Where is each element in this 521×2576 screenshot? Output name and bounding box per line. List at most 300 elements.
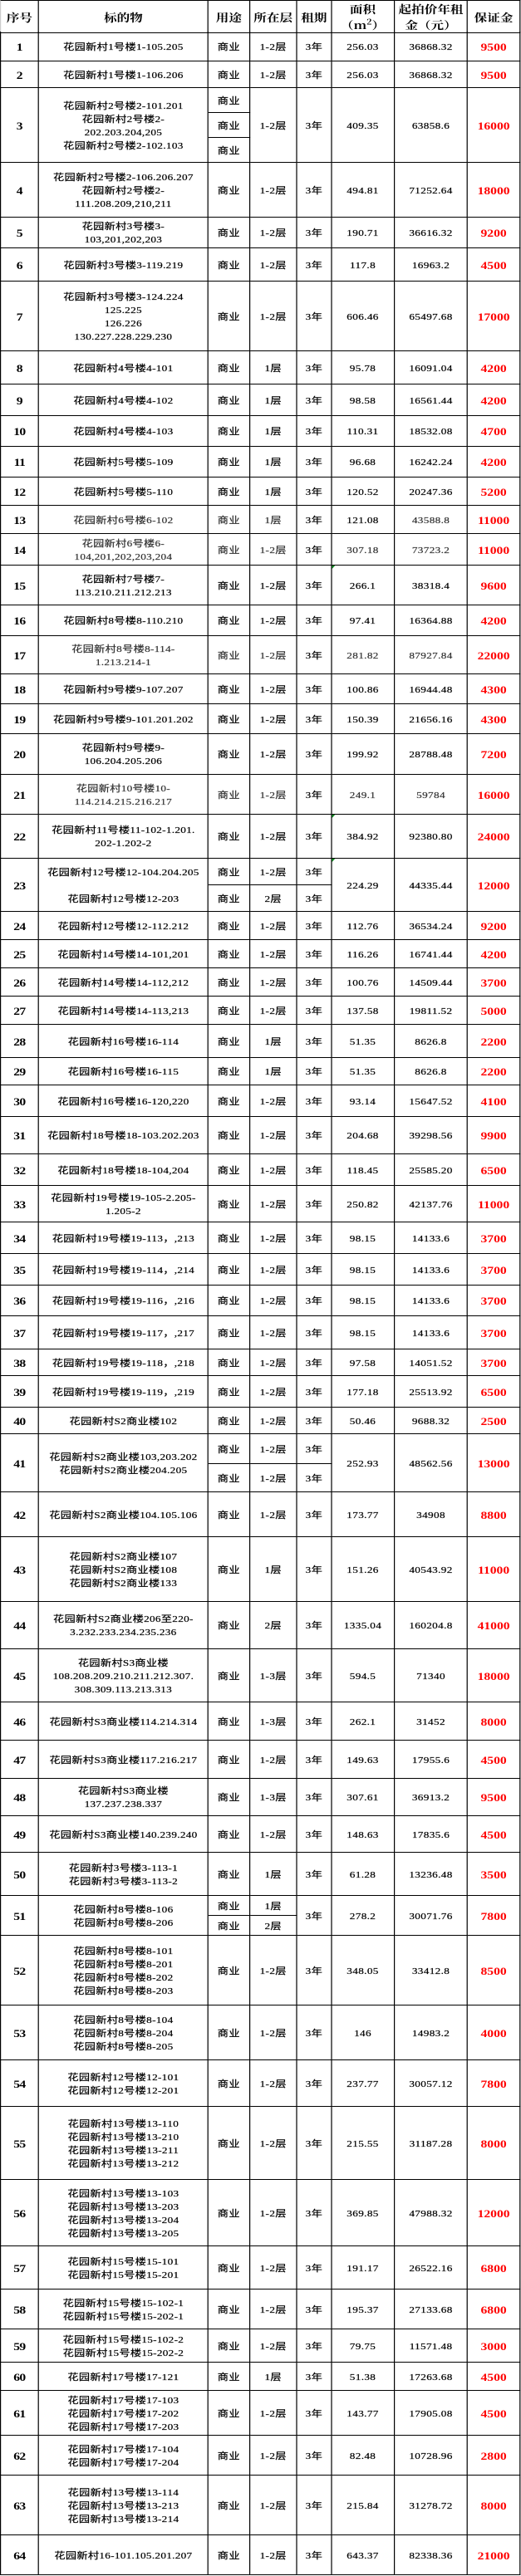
row 16: 4200 (480, 615, 507, 627)
row 46: 商业 (218, 1717, 240, 1727)
row 9: 商业 (218, 395, 240, 405)
row 7: 126.226 (105, 319, 142, 329)
row 64: 商业 (218, 2551, 240, 2561)
row 56: 商业 (218, 2209, 240, 2219)
row 56: 花园新村13号楼13-204 (67, 2216, 179, 2226)
row 35: 花园新村19号楼19-114，,214 (52, 1266, 194, 1276)
row 52: 3年 (306, 1966, 322, 1976)
row 59: 3000 (480, 2340, 507, 2352)
row 34: 14133.6 (412, 1234, 450, 1244)
row 47: 1-2层 (260, 1756, 287, 1765)
row 51: 花园新村8号楼8-106 (73, 1905, 173, 1915)
row 57: 26522.16 (409, 2264, 453, 2274)
row 2: 商业 (218, 70, 240, 80)
row 58: 3年 (306, 2305, 322, 2315)
row 33: 1-2层 (260, 1199, 287, 1209)
row 4: 71252.64 (409, 186, 453, 196)
row 45: 308.309.113.213.313 (75, 1684, 172, 1694)
row 47 (0, 1741, 521, 1779)
row 17: 1-2层 (260, 651, 287, 661)
row 52: 花园新村8号楼8-101 (73, 1947, 173, 1956)
row 12: 20247.36 (409, 487, 453, 497)
row 21: 3年 (306, 791, 322, 801)
header: starting annual rent: 金（元） (405, 17, 457, 32)
header: lease term (297, 0, 332, 33)
row 44 (0, 1602, 521, 1649)
row 37: 商业 (218, 1329, 240, 1339)
row 34: 98.15 (350, 1234, 376, 1244)
row 16: 16364.88 (409, 616, 453, 626)
row 3: 商业 (218, 96, 240, 106)
row 43: 花园新村S2商业楼133 (69, 1578, 177, 1588)
row 10: 花园新村4号楼4-103 (73, 427, 173, 437)
row 18: 4300 (480, 683, 507, 696)
row 31: 9900 (480, 1129, 507, 1142)
row 52: 花园新村8号楼8-201 (73, 1960, 173, 1970)
row 3: 商业 (218, 146, 240, 156)
row 42: 商业 (218, 1510, 240, 1520)
row 55: 花园新村13号楼13-210 (67, 2133, 179, 2143)
row 55: 花园新村13号楼13-110 (68, 2119, 179, 2129)
row 55: 8000 (480, 2138, 507, 2149)
row 61: 花园新村17号楼17-202 (67, 2408, 179, 2418)
row 42: 花园新村S2商业楼104.105.106 (49, 1510, 198, 1520)
row 34: 34 (13, 1232, 26, 1244)
row 45: 45 (13, 1669, 26, 1682)
row 48: 9500 (480, 1791, 507, 1804)
row 64 (0, 2535, 521, 2575)
row 36: 花园新村19号楼19-116，,216 (52, 1296, 194, 1306)
row 45: 商业 (218, 1671, 240, 1681)
row 32: 25585.20 (409, 1166, 453, 1176)
row 5: 商业 (218, 228, 240, 238)
row 54: 3年 (306, 2079, 322, 2089)
row 1 (0, 32, 520, 61)
row 60: 花园新村17号楼17-121 (67, 2372, 179, 2382)
row 47: 商业 (218, 1756, 240, 1765)
row 4: 1-2层 (260, 186, 287, 196)
row 10: 商业 (218, 427, 240, 437)
row 31: 204.68 (347, 1131, 379, 1141)
row 18 (0, 674, 520, 704)
row 44: 3年 (306, 1621, 322, 1631)
row 53: 146 (354, 2028, 371, 2038)
row 44: 3.232.233.234.235.236 (70, 1628, 177, 1638)
row 30: 4100 (480, 1095, 507, 1108)
row 61 (0, 2391, 521, 2436)
header: lease term: 租期 (301, 8, 327, 25)
row 26: 3700 (480, 977, 507, 988)
row 56: 花园新村13号楼13-103 (67, 2189, 179, 2199)
row 15: 花园新村7号楼7- (82, 575, 165, 585)
row 15: 15 (13, 580, 26, 591)
row 4: 494.81 (347, 186, 379, 196)
row 30: 30 (13, 1095, 26, 1108)
row 3: 3年 (306, 121, 322, 131)
row 3: 202.203.204,205 (85, 128, 162, 138)
row 31: 39298.56 (409, 1131, 453, 1141)
row 19: 商业 (218, 714, 240, 724)
row 43: 43 (13, 1563, 26, 1576)
row 64: 82338.36 (409, 2551, 453, 2561)
row 2 (0, 61, 520, 88)
row 37: 37 (13, 1327, 26, 1339)
row 42 (0, 1492, 521, 1537)
row 56: 12000 (478, 2207, 510, 2219)
row 27: 花园新村14号楼14-113,213 (57, 1006, 189, 1016)
row 35: 商业 (218, 1266, 240, 1276)
row 63: 3年 (306, 2501, 322, 2511)
row 34: 商业 (218, 1234, 240, 1244)
row 29: 花园新村16号楼16-115 (68, 1067, 179, 1077)
row 55 (0, 2107, 521, 2180)
row 8: 商业 (218, 364, 240, 374)
row 25: 花园新村14号楼14-101,201 (57, 950, 189, 960)
row 19: 19 (13, 713, 26, 726)
row 57: 3年 (306, 2264, 322, 2274)
row 60 (0, 2363, 521, 2391)
row 41: 3年 (306, 1473, 322, 1483)
row 16: 商业 (218, 616, 240, 626)
row 54: 54 (13, 2078, 26, 2089)
row 53: 14983.2 (412, 2028, 450, 2038)
row 59: 59 (13, 2340, 26, 2352)
row 45 (0, 1649, 521, 1702)
row 9: 98.58 (350, 395, 376, 405)
row 25: 4200 (480, 948, 507, 960)
row 16: 1-2层 (260, 616, 287, 626)
row 9: 花园新村4号楼4-102 (73, 395, 173, 405)
row 35: 14133.6 (412, 1266, 450, 1276)
row 25: 16741.44 (409, 950, 453, 960)
header: area: （m2） (341, 17, 385, 32)
row 53: 3年 (306, 2028, 322, 2038)
row 31: 3年 (306, 1131, 322, 1141)
row 55: 31187.28 (410, 2139, 452, 2149)
row 19: 3年 (306, 714, 322, 724)
row 46: 1-3层 (260, 1717, 287, 1727)
row 13: 3年 (306, 515, 322, 525)
row 16: 3年 (306, 616, 322, 626)
row 63: 花园新村13号楼13-214 (67, 2515, 179, 2525)
row 40: 2500 (480, 1415, 507, 1427)
row 12: 5200 (480, 485, 507, 498)
row 32: 3年 (306, 1166, 322, 1176)
row 46: 262.1 (350, 1717, 376, 1727)
row 32: 118.45 (347, 1166, 379, 1176)
row 55: 3年 (306, 2139, 322, 2149)
row 2: 3年 (306, 70, 322, 80)
row 36: 商业 (218, 1296, 240, 1306)
header: area: 面积 (350, 1, 376, 17)
row 47: 3年 (306, 1756, 322, 1765)
row 15: 1-2层 (260, 581, 287, 591)
row 14: 73723.2 (412, 545, 450, 555)
row 1: 9500 (480, 40, 507, 53)
row 51: 2层 (264, 1922, 282, 1932)
row 64: 643.37 (347, 2551, 379, 2561)
row 44: 41000 (478, 1619, 510, 1632)
row 2: 36868.32 (409, 70, 453, 80)
row 7: 130.227.228.229.230 (74, 332, 172, 342)
row 58: 花园新村15号楼15-202-1 (63, 2312, 184, 2322)
row 45: 108.208.209.210.211.212.307. (53, 1671, 194, 1681)
row 18: 16944.48 (409, 684, 453, 694)
row 27: 27 (13, 1005, 26, 1016)
row 23: 花园新村12号楼12-203 (67, 894, 179, 904)
row 5: 花园新村3号楼3- (82, 222, 165, 232)
row 59: 79.75 (350, 2342, 376, 2352)
row 16: 16 (13, 615, 26, 627)
row 22: 22 (13, 830, 26, 843)
row 50: 花园新村3号楼3-113-1 (69, 1863, 178, 1873)
row 56: 花园新村13号楼13-205 (67, 2229, 179, 2239)
row 19: 1-2层 (260, 714, 287, 724)
row 62: 2800 (480, 2450, 507, 2461)
row 51 (0, 1896, 521, 1936)
row 13 (0, 506, 520, 534)
row 23: 44335.44 (409, 880, 453, 890)
row 3: 商业 (218, 121, 240, 131)
row 6: 117.8 (350, 261, 376, 271)
header: subject (39, 0, 209, 33)
row 23: 3年 (306, 867, 322, 877)
row 51: 1层 (264, 1902, 282, 1912)
row 38: 3年 (306, 1359, 322, 1369)
row 49: 49 (13, 1829, 26, 1840)
row 58: 58 (13, 2304, 26, 2315)
row 11: 4200 (480, 456, 507, 468)
row 10: 3年 (306, 427, 322, 437)
row 48: 307.61 (347, 1793, 379, 1803)
row 51: 51 (13, 1910, 26, 1922)
row 44: 商业 (218, 1621, 240, 1631)
row 29: 29 (13, 1065, 26, 1078)
row 45: 71340 (416, 1671, 445, 1681)
row 24: 商业 (218, 922, 240, 932)
row 40: 9688.32 (412, 1417, 450, 1427)
row 45: 18000 (478, 1669, 510, 1682)
row 50: 商业 (218, 1870, 240, 1880)
row 47: 149.63 (347, 1756, 379, 1765)
row 20: 7200 (480, 748, 507, 761)
row 23 (0, 859, 520, 912)
row 59 (0, 2329, 521, 2363)
row 16: 97.41 (350, 616, 376, 626)
row 15: 266.1 (350, 581, 376, 591)
row 25: 25 (13, 948, 26, 960)
row 55: 花园新村13号楼13-212 (67, 2159, 179, 2169)
row 7: 606.46 (347, 312, 379, 322)
row 4: 3年 (306, 186, 322, 196)
row 35: 1-2层 (260, 1266, 287, 1276)
row 47: 花园新村S3商业楼117.216.217 (49, 1756, 197, 1765)
row 11: 3年 (306, 458, 322, 468)
row 32: 花园新村18号楼18-104,204 (57, 1166, 189, 1176)
row 47: 47 (13, 1754, 26, 1765)
row 33: 花园新村19号楼19-105-2.205- (51, 1193, 196, 1202)
row 3: 16000 (478, 120, 510, 131)
row 21: 16000 (478, 789, 510, 801)
row 17 (0, 636, 520, 674)
row 31: 商业 (218, 1131, 240, 1141)
row 39: 花园新村19号楼19-119，,219 (52, 1387, 194, 1397)
row 13: 花园新村6号楼6-102 (73, 515, 173, 525)
row 13: 43588.8 (412, 515, 450, 525)
row 7: 花园新村3号楼3-124.224 (63, 292, 184, 302)
row 58: 27133.68 (409, 2305, 453, 2315)
row 3: 409.35 (347, 121, 379, 131)
row 48: 商业 (218, 1793, 240, 1803)
row 38: 1-2层 (260, 1359, 287, 1369)
row 61: 花园新村17号楼17-103 (67, 2395, 179, 2405)
row 48: 花园新村S3商业楼 (78, 1786, 169, 1796)
row 13: 13 (13, 513, 26, 526)
row 43 (0, 1537, 521, 1602)
row 39: 39 (13, 1385, 26, 1398)
row 56: 花园新村13号楼13-203 (67, 2202, 179, 2212)
row 60: 60 (13, 2370, 26, 2383)
row 1: 花园新村1号楼1-105.205 (63, 42, 184, 51)
row 3: 花园新村2号楼2-101.201 (63, 101, 184, 111)
row 46: 花园新村S3商业楼114.214.314 (49, 1717, 197, 1727)
row 21: 1-2层 (260, 791, 287, 801)
row 56: 3年 (306, 2209, 322, 2219)
row 50: 61.28 (350, 1870, 376, 1880)
row 7: 商业 (218, 312, 240, 322)
row 15: 113.210.211.212.213 (75, 588, 172, 598)
row 26: 14509.44 (409, 978, 453, 988)
row 63: 215.84 (347, 2501, 379, 2511)
row 64: 64 (13, 2549, 26, 2561)
row 22: 384.92 (347, 832, 379, 842)
table header row (0, 0, 520, 33)
row 54: 7800 (480, 2078, 507, 2089)
row 55: 1-2层 (260, 2139, 287, 2149)
row 52: 1-2层 (260, 1966, 287, 1976)
row 11: 1层 (264, 458, 282, 468)
row 20: 商业 (218, 750, 240, 760)
row 17: 3年 (306, 651, 322, 661)
row 38: 14051.52 (409, 1359, 453, 1369)
row 20: 20 (13, 748, 26, 761)
row 38: 商业 (218, 1359, 240, 1369)
row 53: 4000 (480, 2026, 507, 2040)
row 60: 3年 (306, 2372, 322, 2382)
row 42: 1-2层 (260, 1510, 287, 1520)
row 39: 6500 (480, 1385, 507, 1398)
row 30: 93.14 (350, 1096, 376, 1106)
row 19: 150.39 (347, 714, 379, 724)
row 21: 花园新村10号楼10- (76, 784, 170, 794)
row 35 (0, 1254, 520, 1286)
row 41 (0, 1434, 521, 1492)
row 61: 商业 (218, 2408, 240, 2418)
header: serial number: 序号 (7, 8, 32, 25)
row 31: 花园新村18号楼18-103.202.203 (47, 1131, 199, 1141)
row 2: 2 (17, 68, 22, 81)
row 61: 61 (13, 2407, 26, 2420)
row 21: 114.214.215.216.217 (75, 797, 172, 807)
row 12: 3年 (306, 487, 322, 497)
row 23: 花园新村12号楼12-104.204.205 (47, 867, 199, 877)
row 60: 4500 (480, 2370, 507, 2383)
row 28: 51.35 (350, 1036, 376, 1046)
header: floor (250, 0, 297, 33)
row 19: 21656.16 (409, 714, 453, 724)
row 36: 14133.6 (412, 1296, 450, 1306)
row 32: 商业 (218, 1166, 240, 1176)
row 62: 3年 (306, 2451, 322, 2461)
row 48: 137.237.238.337 (85, 1800, 162, 1810)
row 21: 商业 (218, 791, 240, 801)
row 52: 商业 (218, 1966, 240, 1976)
row 19: 花园新村9号楼9-101.201.202 (53, 714, 194, 724)
row 10: 18532.08 (409, 427, 453, 437)
row 33: 250.82 (347, 1199, 379, 1209)
row 49: 3年 (306, 1830, 322, 1840)
row 61: 1-2层 (260, 2408, 287, 2418)
row 14: 花园新村6号楼6- (82, 538, 165, 548)
row 57: 花园新村15号楼15-101 (67, 2257, 179, 2267)
row 26 (0, 968, 520, 997)
row 24: 24 (13, 920, 26, 932)
row 20 (0, 734, 520, 775)
row 9: 4200 (480, 394, 507, 407)
row 40: 3年 (306, 1417, 322, 1427)
row 37: 3700 (480, 1327, 507, 1339)
row 29: 1层 (264, 1067, 282, 1077)
row 56: 369.85 (347, 2209, 379, 2219)
row 27: 3年 (306, 1006, 322, 1016)
row 45: 3年 (306, 1671, 322, 1681)
row 56: 56 (13, 2207, 26, 2219)
row 38: 97.58 (350, 1359, 376, 1369)
row 13: 1层 (264, 515, 282, 525)
row 35: 3年 (306, 1266, 322, 1276)
row 4 (0, 163, 520, 218)
row 35: 35 (13, 1264, 26, 1276)
row 54: 商业 (218, 2079, 240, 2089)
row 16: 花园新村8号楼8-110.210 (63, 616, 183, 626)
row 11: 96.68 (350, 458, 376, 468)
row 34: 3年 (306, 1234, 322, 1244)
row 32: 1-2层 (260, 1166, 287, 1176)
row 43: 花园新村S2商业楼107 (69, 1551, 177, 1561)
row 6: 4500 (480, 259, 507, 271)
row 5: 3年 (306, 228, 322, 238)
row 5: 36616.32 (409, 228, 453, 238)
row 6: 花园新村3号楼3-119.219 (63, 261, 183, 271)
row 49: 商业 (218, 1830, 240, 1840)
row 63: 8000 (480, 2500, 507, 2511)
row 38 (0, 1349, 520, 1376)
row 20: 28788.48 (409, 750, 453, 760)
row 41: 商业 (218, 1473, 240, 1483)
row 6: 商业 (218, 261, 240, 271)
row 63: 31278.72 (409, 2501, 453, 2511)
row 56: 1-2层 (260, 2209, 287, 2219)
row 30: 15647.52 (409, 1096, 453, 1106)
row 33 (0, 1186, 520, 1222)
row 51: 商业 (218, 1902, 240, 1912)
row 63: 63 (13, 2500, 26, 2511)
row 25 (0, 940, 520, 968)
row 53: 商业 (218, 2028, 240, 2038)
row 44: 160204.8 (409, 1621, 453, 1631)
row 57 (0, 2246, 521, 2290)
row 8: 1层 (264, 364, 282, 374)
